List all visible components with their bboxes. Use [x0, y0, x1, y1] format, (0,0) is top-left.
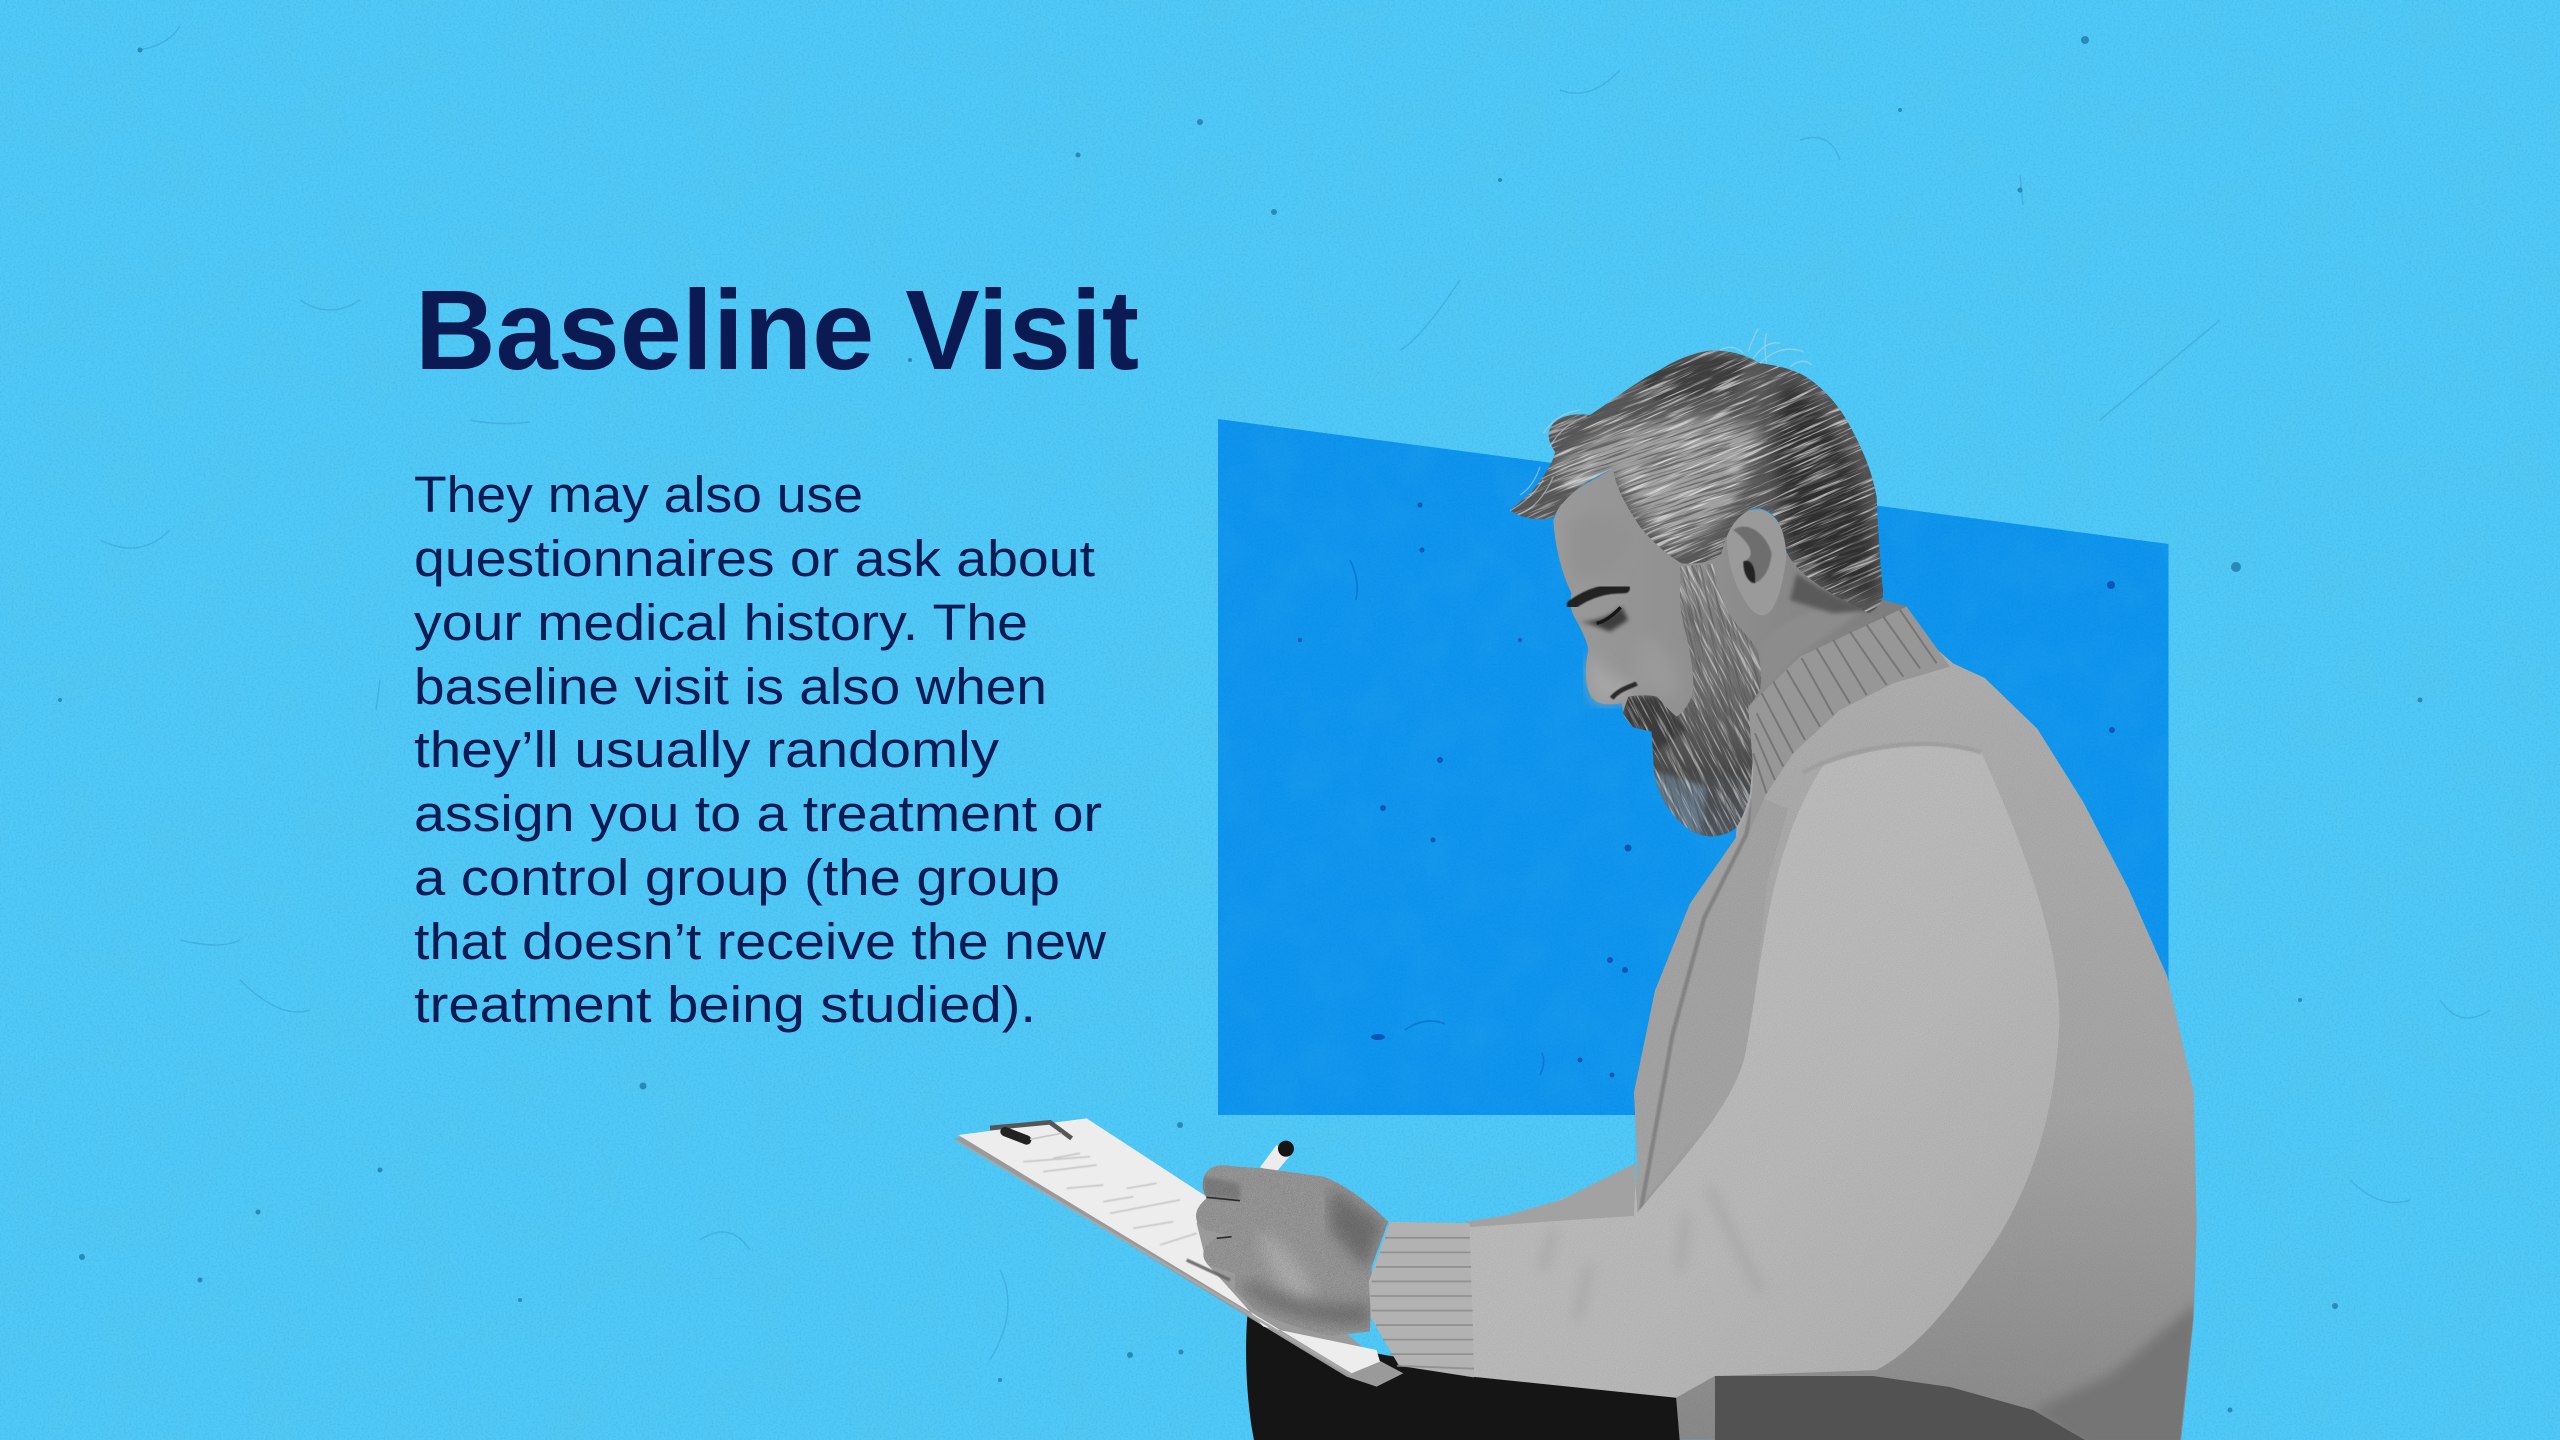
body text: questionnaires or ask about — [414, 530, 1095, 587]
beard — [1622, 564, 1761, 836]
clipboard form lines — [1023, 1153, 1230, 1280]
torso side shadow — [2033, 1300, 2200, 1440]
zipper line — [1641, 765, 1760, 1209]
body text: assign you to a treatment or — [414, 785, 1102, 842]
blue backdrop shape — [1218, 419, 2169, 1115]
body text: they’ll usually randomly — [414, 721, 1000, 778]
body text: a control group (the group — [414, 849, 1060, 906]
sweater texture — [1452, 605, 2202, 1440]
body text: baseline visit is also when — [414, 658, 1047, 715]
ear — [1727, 509, 1786, 615]
collar — [1748, 607, 1950, 830]
sleeve cuff — [1369, 1222, 1474, 1377]
sleeve folds — [1543, 1190, 1760, 1317]
pen — [1260, 1141, 1294, 1172]
body text: treatment being studied). — [414, 976, 1036, 1033]
sweater arm — [1459, 746, 2059, 1398]
hair — [1510, 350, 1884, 613]
neck and face — [1553, 468, 1908, 727]
head — [1510, 328, 1950, 836]
clipboard clip — [990, 1122, 1072, 1140]
clipboard — [954, 1118, 1403, 1387]
body text: They may also use — [414, 466, 863, 523]
face shading — [1567, 514, 1877, 703]
back forearm — [1465, 1163, 1636, 1227]
body text — [414, 466, 1106, 1033]
eyebrow and eye — [1572, 588, 1637, 698]
trousers — [1246, 1290, 1680, 1440]
hand — [1190, 1163, 1393, 1340]
body text: that doesn’t receive the new — [414, 913, 1106, 970]
sweater front panel — [1633, 794, 1788, 1216]
chair back — [1715, 1376, 2085, 1440]
shoulder fold — [1802, 744, 1981, 773]
sweater torso — [1634, 605, 2197, 1440]
title: Baseline Visit — [415, 267, 1139, 393]
person illustration — [954, 328, 2197, 1440]
body text: your medical history. The — [414, 594, 1028, 651]
hair wisps — [1510, 328, 1812, 515]
